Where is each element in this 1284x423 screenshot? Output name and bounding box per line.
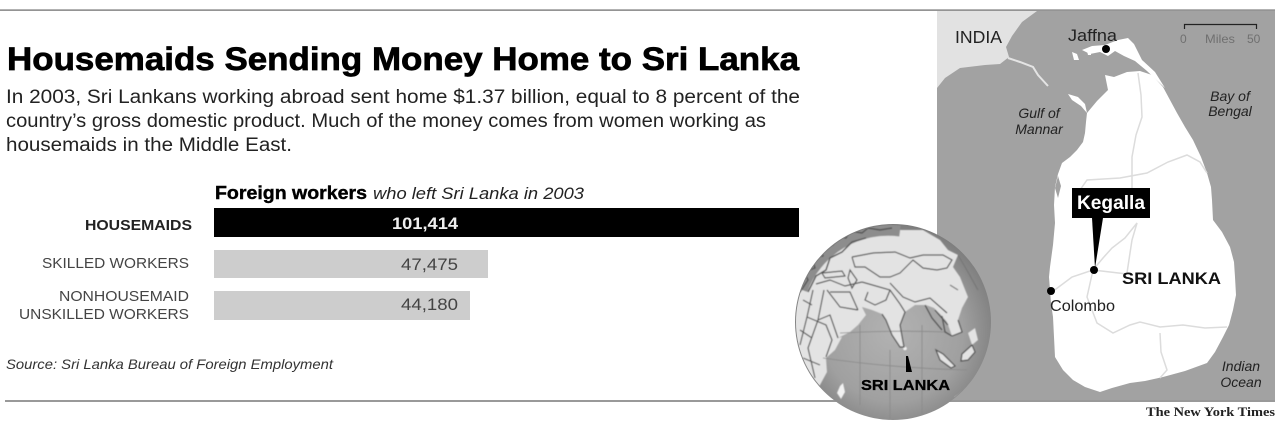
map: northern islets <box>1072 50 1091 60</box>
map: Sri Lanka island <box>1049 71 1236 392</box>
globe: Madagascar <box>837 383 845 399</box>
label: Gulf of Mannar: Gulf of <box>1018 105 1062 121</box>
globe: Sri Lanka label: SRI LANKA <box>861 377 950 394</box>
label: Bay of Bengal: Bengal <box>1208 103 1253 119</box>
map: Puttalam lagoon <box>1055 176 1061 198</box>
label: Sri Lanka: SRI LANKA <box>1122 269 1221 288</box>
scale bar <box>1180 24 1261 46</box>
bar: housemaids: HOUSEMAIDS <box>85 217 192 234</box>
intro text: housemaids in the Middle East. <box>6 135 292 156</box>
map: roads <box>1052 73 1227 378</box>
intro text <box>6 87 800 156</box>
bar: skilled workers: SKILLED WORKERS <box>42 255 189 272</box>
scale bar: 0 <box>1180 32 1187 46</box>
label: Gulf of Mannar: Mannar <box>1015 121 1064 137</box>
panel: map of Sri Lanka <box>937 11 1275 401</box>
globe: rim texture <box>800 228 892 292</box>
scale bar: Miles <box>1205 32 1235 46</box>
label: Jaffna: Jaffna <box>1068 27 1118 45</box>
globe: northeastern rim lines <box>950 255 978 290</box>
intro text: country’s gross domestic product. Much of the money comes from women working as <box>6 111 766 132</box>
bar: housemaids: 101,414 <box>392 214 459 233</box>
globe locator <box>790 224 991 420</box>
bar: nonhousemaid unskilled workers: NONHOUSEMAID <box>59 288 189 305</box>
source note: Source: Sri Lanka Bureau of Foreign Employment <box>6 356 334 372</box>
globe: graticule <box>822 325 958 406</box>
scale bar: 50 <box>1247 32 1261 46</box>
bar: nonhousemaid unskilled workers <box>19 288 470 323</box>
map: Mannar island <box>1068 94 1087 113</box>
label: Gulf of Mannar <box>1015 105 1064 137</box>
globe: dense northwestern rim <box>802 230 900 290</box>
chart heading: Foreign workers <box>215 183 367 203</box>
map: Adam's Bridge <box>1008 58 1048 86</box>
label: Indian Ocean: Indian <box>1222 358 1260 374</box>
label: Bay of Bengal <box>1208 88 1253 119</box>
chart heading <box>215 183 585 203</box>
bar: housemaids <box>85 208 799 237</box>
label: Bay of Bengal: Bay of <box>1210 88 1252 104</box>
callout: Kegalla: Kegalla <box>1077 193 1145 214</box>
globe: country borders <box>800 252 975 378</box>
globe: southern ice arc <box>954 394 958 397</box>
map: Jaffna peninsula <box>1082 38 1165 88</box>
label: India: INDIA <box>955 27 1002 47</box>
marker: Colombo <box>1047 287 1055 295</box>
label: Indian Ocean <box>1220 358 1262 390</box>
map: India landmass <box>937 11 1037 88</box>
bar: skilled workers <box>42 250 488 278</box>
bar: nonhousemaid unskilled workers: 44,180 <box>401 295 458 314</box>
label: Colombo: Colombo <box>1050 298 1115 315</box>
bar: nonhousemaid unskilled workers: UNSKILLED WORKERS <box>19 306 189 323</box>
chart heading: who left Sri Lanka in 2003 <box>373 184 585 203</box>
globe: Sri Lanka island <box>903 347 907 350</box>
bottom rule <box>5 400 1275 402</box>
title: Housemaids Sending Money Home to Sri Lanka <box>7 41 799 77</box>
globe: Sri Lanka marker <box>906 356 912 372</box>
callout: Kegalla <box>1072 188 1150 268</box>
marker: Kegalla <box>1090 266 1098 274</box>
globe: landmasses <box>790 225 978 420</box>
label: Indian Ocean: Ocean <box>1220 374 1262 390</box>
intro text: In 2003, Sri Lankans working abroad sent home $1.37 billion, equal to 8 percent of the <box>6 87 800 108</box>
credit: The New York Times <box>1146 404 1275 419</box>
marker: Jaffna <box>1102 45 1110 53</box>
bar chart: foreign workers <box>19 183 799 323</box>
bar: skilled workers: 47,475 <box>401 255 458 274</box>
